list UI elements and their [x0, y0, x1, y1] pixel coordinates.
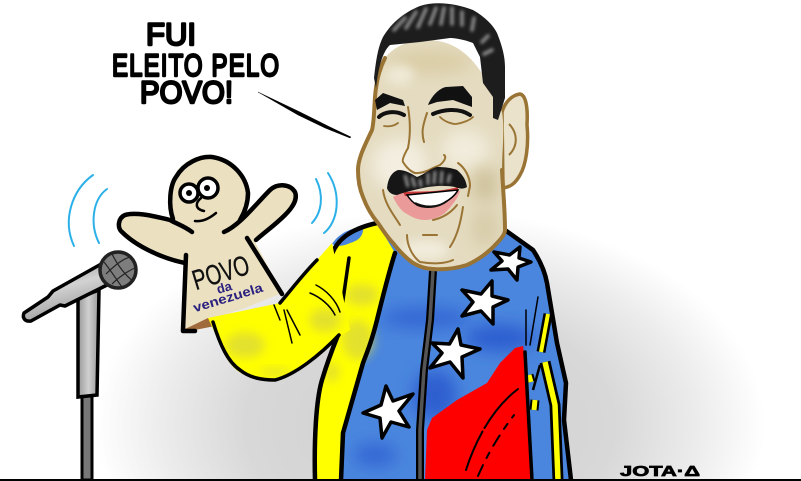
speech pointer line [258, 92, 351, 138]
moustache [387, 167, 467, 195]
star 1 [491, 247, 531, 280]
hand puppet [118, 156, 296, 331]
eyes [379, 110, 473, 126]
speech text: POVO! [140, 75, 233, 110]
zipper [420, 271, 433, 480]
star 3 [430, 329, 480, 378]
puppet label: venezuela [191, 280, 265, 315]
sound waves [69, 173, 337, 246]
jacket outlines [315, 223, 571, 480]
mouth [393, 187, 460, 220]
speech text: ELEITO PELO [112, 48, 279, 83]
nose and face folds [383, 107, 470, 263]
bottom border [0, 479, 801, 481]
star 4 [363, 386, 413, 438]
yellow shading [325, 284, 379, 382]
arm sleeve [208, 243, 350, 380]
speech text: FUI [146, 17, 196, 52]
yellow panel [315, 223, 395, 480]
signature: JOTA·Δ [620, 463, 700, 480]
puppet label [189, 249, 265, 315]
face outline [358, 58, 505, 269]
hair [374, 3, 505, 120]
microphone [23, 252, 136, 480]
face [358, 40, 505, 269]
mic head [100, 252, 136, 288]
stand [78, 290, 99, 397]
sleeve shading [225, 308, 341, 376]
sleeve stripes [529, 314, 558, 480]
star 2 [462, 281, 508, 324]
speech text [112, 17, 279, 110]
body: jacket [315, 223, 571, 480]
head [358, 3, 528, 269]
red panel [425, 346, 532, 480]
stand pole [82, 395, 92, 480]
puppet label: da [215, 278, 234, 297]
eyebrows [375, 86, 472, 110]
ear [502, 94, 528, 188]
puppet eyes and face [180, 178, 218, 221]
handle [23, 263, 113, 321]
puppet label: POVO [189, 249, 253, 296]
jacket blue shading [353, 307, 535, 467]
shoulder blue patch [332, 227, 363, 246]
